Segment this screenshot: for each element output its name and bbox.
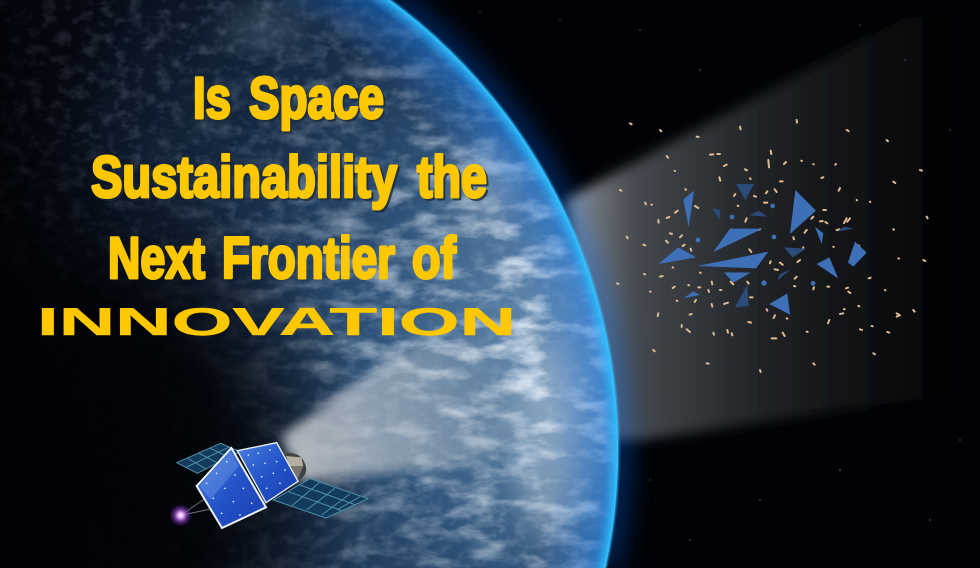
blue limb [0,0,618,568]
stars [480,12,961,541]
title line 2: Sustainability [93,147,399,212]
title line 1: Is [193,66,231,131]
title [37,66,516,344]
bright rim [390,0,618,568]
night side shading [0,171,358,568]
right solar wing [273,479,368,518]
earth [0,0,640,568]
title line 3 [108,226,457,291]
title line 1: Space [251,68,386,133]
title line 4: INNOVATION [37,301,516,344]
title line 1: Is [195,68,233,133]
cloud texture [0,0,640,568]
left solar wing [177,443,240,473]
satellite light beam on earth [282,338,545,482]
debris cloud [617,120,928,372]
title line 2: Sustainability [91,145,397,210]
title line 1: Space [249,66,384,131]
body front panel [197,448,266,528]
lens barrel [285,453,306,481]
panel cell dots [206,449,286,516]
atmosphere glow [390,0,618,568]
title line 3: Frontier [222,226,395,291]
right light beam hitting debris [565,6,968,440]
title line 2: the [417,145,487,210]
blue triangular fragments [658,190,867,315]
satellite [169,443,368,528]
title line 3: Next [108,226,205,291]
title line 2: the [419,147,489,212]
bright cloud masses [512,340,588,540]
body rear panel [237,443,298,503]
purple thruster flare [169,504,192,527]
tan debris specks [617,120,928,372]
antenna struts [181,499,209,515]
planet body [0,0,618,568]
title line 1 [193,66,386,133]
panel highlight [199,451,239,499]
title line 3: of [412,226,457,291]
